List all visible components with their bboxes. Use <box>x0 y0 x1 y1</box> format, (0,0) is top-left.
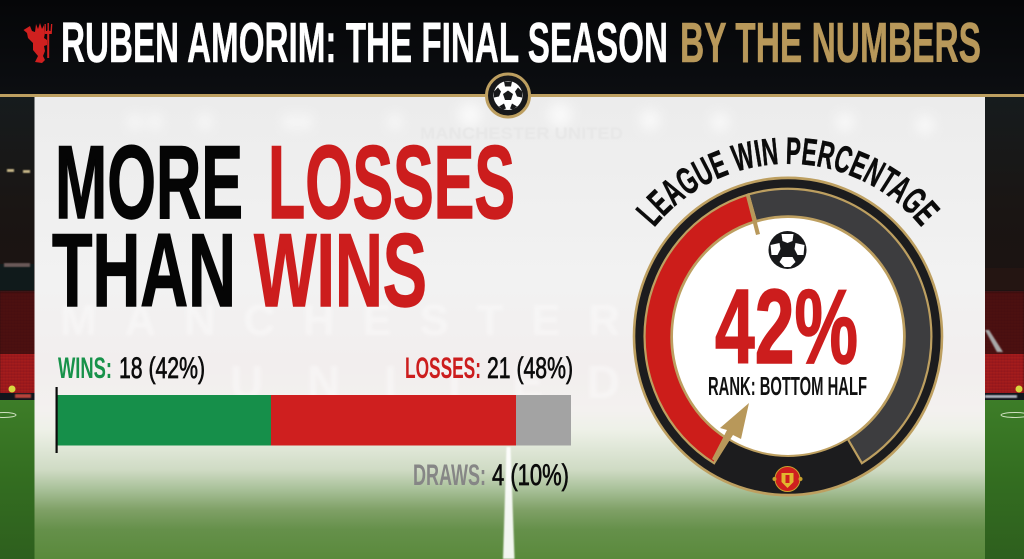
headline: more losses than wins: WINS <box>254 213 427 329</box>
curved gauge title: LEAGUE WIN PERCENTAGE <box>635 137 941 227</box>
headline: more losses than wins: MORE <box>55 125 243 241</box>
gauge dial <box>634 178 942 495</box>
label: losses: 21 (48%) <box>487 352 573 385</box>
label: losses: LOSSES: <box>405 352 481 385</box>
headline: more losses than wins: LOSSES <box>268 125 515 241</box>
icon: red devil crest <box>24 23 52 63</box>
icon: football medallion on the rule <box>486 74 530 117</box>
bar segment: wins <box>57 395 271 446</box>
gauge start tick <box>746 196 760 235</box>
headline: more losses than wins: THAN <box>52 213 236 329</box>
faded stadium lights <box>128 103 934 134</box>
gold rule <box>0 94 1024 97</box>
rank note: RANK: BOTTOM HALF <box>708 371 867 401</box>
label: wins: WINS: <box>58 352 112 385</box>
bar segment: losses <box>271 395 516 446</box>
arc: remaining share <box>748 189 931 463</box>
label: wins <box>58 352 205 385</box>
icon: football <box>768 231 806 269</box>
label: wins: 18 (42%) <box>119 352 205 385</box>
label: draws: 4 (10%) <box>492 459 569 492</box>
big value 42%: 42% <box>715 268 858 386</box>
bar axis tick <box>56 387 58 453</box>
icon: club crest <box>772 466 802 492</box>
bar segment: draws <box>516 395 571 446</box>
faded stadium lettering: Manchester United: MANCHESTER UNITED <box>420 124 623 143</box>
label: draws: DRAWS: <box>413 459 486 492</box>
headline: more losses than wins <box>52 125 515 329</box>
panel: translucent white content area <box>34 97 985 559</box>
faded seat lettering: MANCHESTER <box>60 296 620 345</box>
gauge: league win percentage <box>632 137 944 496</box>
pitch halfway line <box>503 447 514 559</box>
gauge pointer arrow <box>712 403 749 462</box>
header band <box>0 0 1024 97</box>
stacked result bar <box>56 352 573 492</box>
faded seat lettering: UNITED <box>230 356 620 408</box>
arc: win share <box>645 194 756 463</box>
faded seat lettering <box>60 296 620 408</box>
